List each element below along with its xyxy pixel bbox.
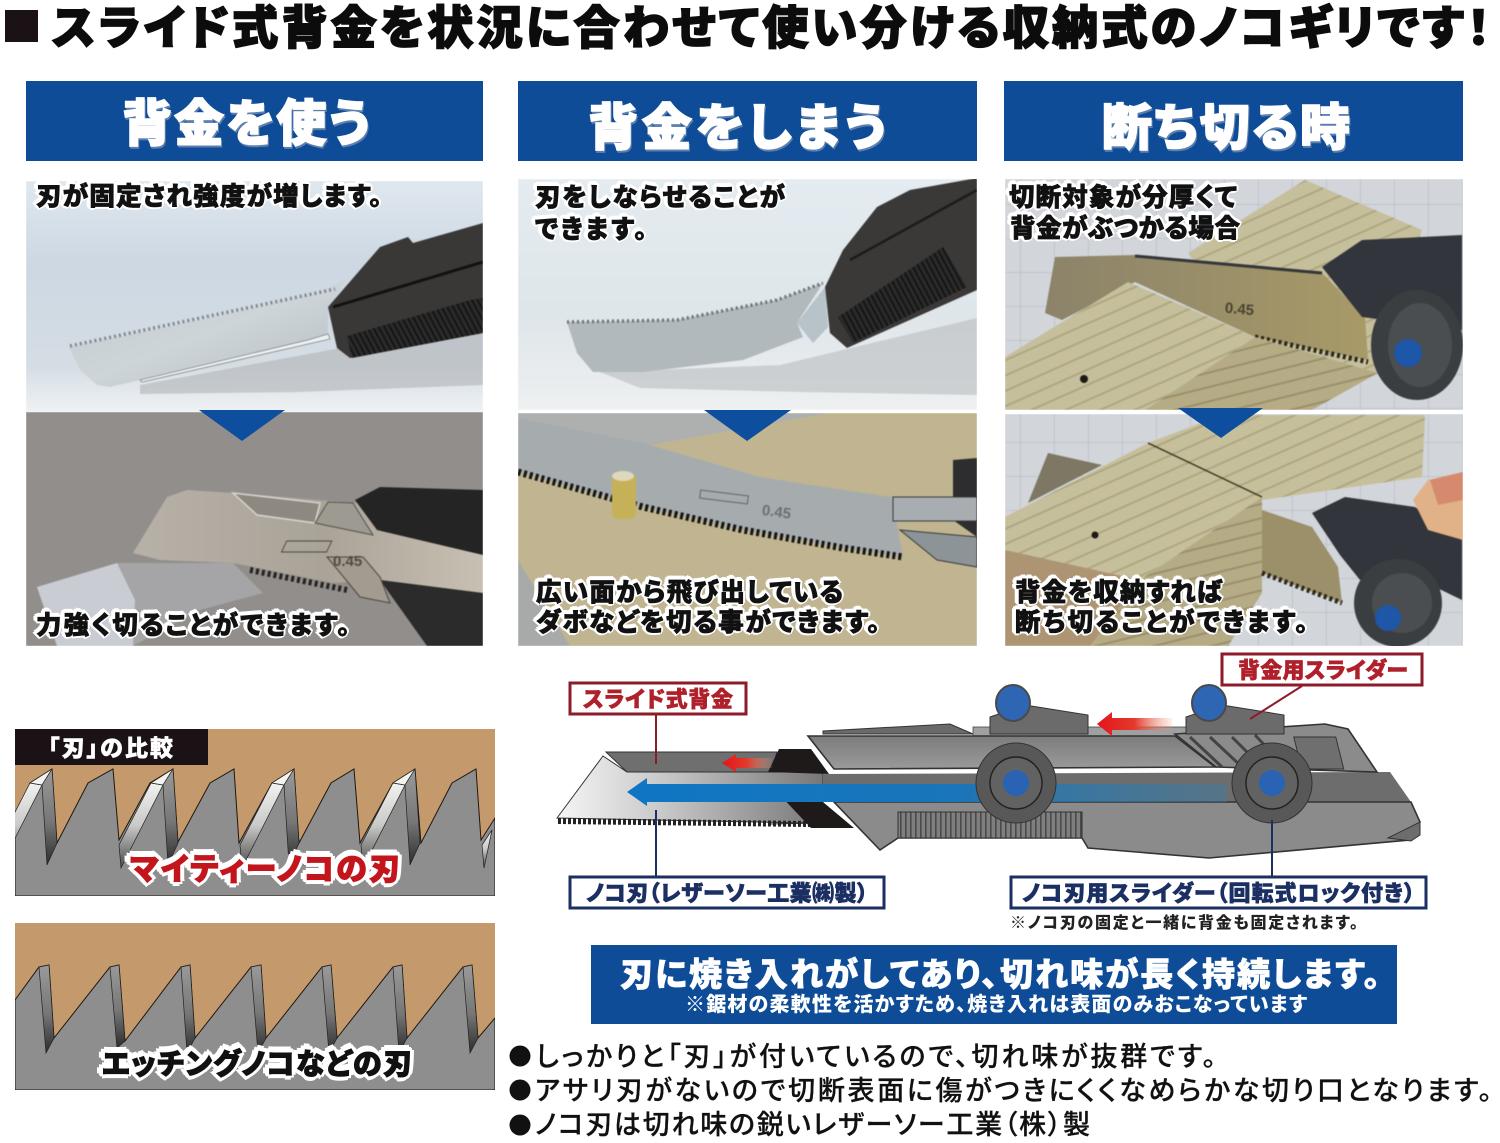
chart: etching saw teeth: [15, 923, 495, 1090]
diagram: saw structure: [557, 654, 1426, 932]
callout: saw blade: ノコ刃（レザーソー工業㈱製）: [586, 881, 868, 906]
caption: line two: できます。: [535, 216, 647, 244]
photo: sawing with the spine on grey background: 0.45: [333, 553, 362, 570]
caption: can cut through: 断ち切ることができます。: [1015, 608, 1308, 637]
heading: cutting through: [1004, 81, 1463, 161]
panel: blade comparison, etching saw: [15, 923, 495, 1090]
heading: retract the spine: 背金をしまう: [588, 100, 886, 156]
label: etching saw blade: エッチングノコなどの刃: [102, 1047, 412, 1081]
banner headline: 刃に焼き入れがしてあり、切れ味が長く持続します。: [620, 956, 1380, 993]
caption: thick material: 切断対象が分厚くて: [1009, 183, 1237, 212]
panel: cutting through: [1004, 81, 1463, 647]
heading: use the spine: 背金を使う: [122, 96, 370, 152]
callout: sliding spine: [570, 683, 746, 764]
panel: blade comparison, mighty saw: [0, 729, 495, 896]
banner: hardened blade: [591, 945, 1397, 1024]
heading: retract the spine: [518, 81, 977, 161]
arrow: down: [704, 410, 791, 441]
heading: cutting through: 断ち切る時: [1102, 100, 1350, 156]
callout: blade slider: [1011, 820, 1426, 908]
saw illustration: [557, 685, 1420, 858]
list: features: [510, 1042, 1492, 1140]
photo: spine hits thick wood: [1005, 179, 1463, 410]
arrow: red spine slide left: [722, 754, 772, 772]
arrow: blue blade slide: [627, 778, 1227, 806]
note: spine fixed with blade: ※ノコ刃の固定と一緒に背金も固定されます。: [1010, 913, 1358, 932]
arrow: red slider move left: [1097, 712, 1172, 736]
callout: blade slider: ノコ刃用スライダー（回転式ロック付き）: [1022, 881, 1415, 906]
photo: spine retracted cutting through: [1005, 414, 1463, 647]
callout: spine slider: [1222, 654, 1422, 719]
panel: use the spine: [26, 81, 483, 646]
bullet: manufacturer: ノコ刃は切れ味の鋭いレザーソー工業（株）製: [535, 1110, 1090, 1140]
caption: cut powerfully: 力強く切ることができます。: [36, 611, 350, 640]
caption: flex the blade: 刃をしならせることが: [535, 183, 786, 212]
callout: sliding spine: スライド式背金: [583, 687, 733, 712]
label: mighty saw blade: マイティーノコの刃: [130, 852, 400, 887]
photo: flexing the blade: [518, 178, 977, 410]
photo: cutting a dowel flush: 0.45: [761, 502, 792, 523]
label: blade comparison: [15, 729, 208, 765]
banner note: ※鋸材の柔軟性を活かすため、焼き入れは表面のみおこなっています: [685, 992, 1307, 1016]
callout: spine slider: 背金用スライダー: [1238, 658, 1408, 683]
bullet: sharpness: しっかりと「刃」が付いているので、切れ味が抜群です。: [536, 1042, 1216, 1072]
caption: spine collides: 背金がぶつかる場合: [1010, 214, 1240, 243]
arrow: down: [1178, 408, 1263, 438]
callout: saw blade: [570, 810, 884, 908]
panel: retract the spine: [518, 81, 977, 646]
photo: blade with spine on grey background: [26, 181, 483, 412]
caption: retract the spine: 背金を収納すれば: [1015, 579, 1223, 607]
caption: can cut dowels: ダボなどを切る事ができます。: [536, 608, 880, 637]
photo: spine hits thick wood: 0.45: [1224, 300, 1255, 319]
arrow: down: [199, 410, 285, 441]
caption: blade is fixed: 刃が固定され強度が増します。: [36, 182, 382, 211]
photo: sawing with the spine on grey background: [26, 412, 483, 646]
chart: mighty saw teeth: [0, 729, 495, 896]
bullet: smooth cut: アサリ刃がないので切断表面に傷がつきにくくなめらかな切り口となります。: [535, 1076, 1492, 1106]
title: スライド式背金を状況に合わせて使い分ける収納式のノコギリです！: [52, 2, 1490, 54]
label: blade comparison: 「刃」の比較: [48, 735, 173, 761]
heading: use the spine: [26, 81, 483, 161]
caption: protruding dowels: 広い面から飛び出している: [536, 579, 843, 607]
photo: cutting a dowel flush: [518, 413, 977, 646]
